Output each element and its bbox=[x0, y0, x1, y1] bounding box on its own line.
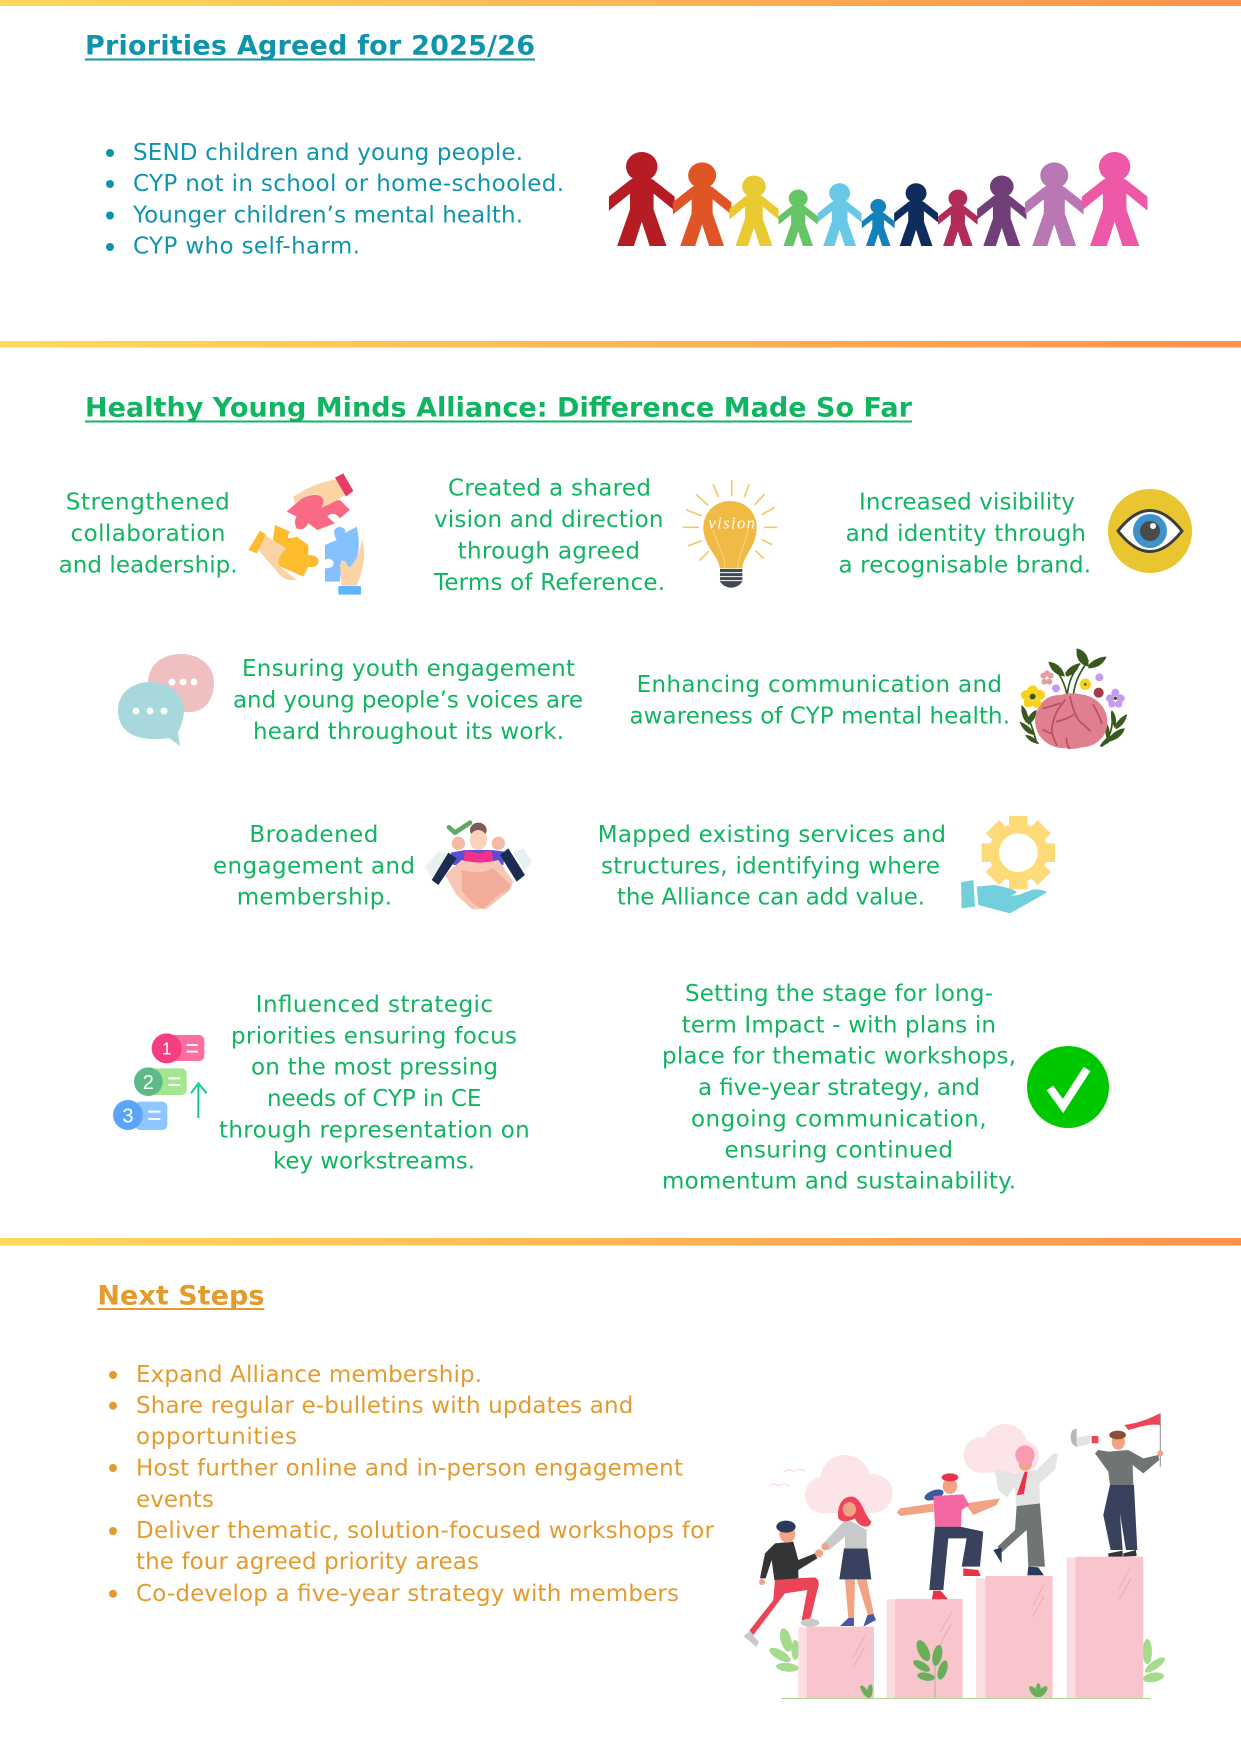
heading: priorities: Priorities Agreed for 2025/26 bbox=[85, 30, 535, 62]
text: youth engagement bbox=[233, 656, 583, 745]
icon: ranked list bbox=[113, 1033, 207, 1130]
next steps bullet list: opportunities bbox=[136, 1424, 297, 1450]
text: broadened membership: membership. bbox=[237, 884, 392, 910]
text: long-term impact bbox=[662, 981, 1016, 1194]
text: visibility bbox=[838, 490, 1091, 578]
icon: ranked list: 3 bbox=[122, 1105, 134, 1127]
person: woman helping bbox=[821, 1497, 876, 1627]
heading: next steps: Next Steps bbox=[97, 1280, 264, 1312]
icon: ranked list: 2 bbox=[143, 1072, 154, 1094]
text: strategic priorities: key workstreams. bbox=[273, 1148, 475, 1174]
next steps bullet list: the four agreed priority areas bbox=[136, 1549, 479, 1575]
text: communication: Enhancing communication and bbox=[637, 672, 1002, 698]
text: long-term impact: term Impact - with plans in bbox=[682, 1012, 996, 1038]
text: strategic priorities: Influenced strategic bbox=[256, 992, 493, 1018]
text: long-term impact: a five-year strategy, and bbox=[698, 1075, 980, 1101]
clouds and birds bbox=[769, 1424, 1039, 1513]
text: strategic priorities: on the most pressing bbox=[251, 1055, 498, 1081]
icon: speech bubbles bbox=[118, 654, 214, 746]
text: collaboration bbox=[59, 490, 238, 578]
text: long-term impact: place for thematic workshops, bbox=[662, 1044, 1016, 1070]
text: mapped services: Mapped existing services and bbox=[598, 822, 946, 848]
text: shared vision: Terms of Reference. bbox=[433, 570, 665, 596]
panel: priorities agreed bbox=[85, 30, 1147, 260]
plants in front bbox=[859, 1638, 1049, 1699]
text: mapped services: structures, identifying where bbox=[601, 853, 940, 879]
text: shared vision bbox=[433, 476, 665, 596]
plants behind bbox=[767, 1627, 1167, 1684]
text: shared vision: Created a shared bbox=[448, 476, 651, 502]
step blocks bbox=[781, 1557, 1151, 1699]
text: strategic priorities: needs of CYP in CE bbox=[267, 1086, 481, 1112]
heading: difference made: Healthy Young Minds Alliance: Difference Made So Far bbox=[85, 392, 913, 424]
icon: vision light bulb: vision bbox=[708, 513, 755, 532]
icon: gear in hand bbox=[961, 816, 1055, 913]
priorities bullet list: Younger children’s mental health. bbox=[132, 202, 523, 228]
next steps bullet list: Co-develop a five-year strategy with members bbox=[136, 1581, 679, 1607]
priorities bullet list: CYP who self-harm. bbox=[133, 234, 360, 260]
text: visibility: Increased visibility bbox=[859, 490, 1075, 516]
text: long-term impact: ongoing communication, bbox=[691, 1106, 986, 1132]
next steps bullet list: Expand Alliance membership. bbox=[136, 1362, 482, 1388]
text: long-term impact: Setting the stage for long- bbox=[685, 981, 993, 1007]
icon: puzzle hands bbox=[248, 473, 364, 595]
icon: vision light bulb bbox=[683, 481, 777, 588]
next steps bullet list: events bbox=[136, 1487, 214, 1513]
text: broadened membership: engagement and bbox=[213, 853, 415, 879]
text: shared vision: through agreed bbox=[458, 538, 640, 564]
person: man with megaphone and flag bbox=[1071, 1413, 1163, 1557]
text: broadened membership: Broadened bbox=[249, 822, 378, 848]
priorities bullet list bbox=[106, 140, 564, 260]
text: visibility: and identity through bbox=[846, 521, 1086, 547]
next steps bullet list bbox=[109, 1362, 715, 1607]
text: strategic priorities: priorities ensuring focus bbox=[231, 1023, 517, 1049]
person: man with red tie bbox=[993, 1445, 1058, 1575]
text: collaboration: Strengthened bbox=[66, 490, 230, 516]
next steps bullet list: Share regular e-bulletins with updates and bbox=[136, 1393, 633, 1419]
person: climbing man bbox=[743, 1521, 823, 1647]
priorities bullet list: CYP not in school or home-schooled. bbox=[133, 171, 564, 197]
text: mapped services bbox=[598, 822, 946, 910]
next steps bullet list: Deliver thematic, solution-focused workshops for bbox=[136, 1518, 715, 1544]
icon: paper-chain people bbox=[609, 152, 1147, 246]
icon: green check bbox=[1027, 1046, 1109, 1128]
text: long-term impact: ensuring continued bbox=[724, 1138, 953, 1164]
text: mapped services: the Alliance can add value. bbox=[617, 884, 925, 910]
text: visibility: a recognisable brand. bbox=[838, 552, 1091, 578]
text: youth engagement: Ensuring youth engagement bbox=[242, 656, 575, 682]
illustration: people climbing steps bbox=[743, 1413, 1167, 1699]
icon: handshake bbox=[425, 823, 532, 909]
priorities bullet list: SEND children and young people. bbox=[133, 140, 523, 166]
text: long-term impact: momentum and sustainability. bbox=[662, 1168, 1016, 1194]
text: broadened membership bbox=[213, 822, 415, 910]
text: strategic priorities: through representation on bbox=[219, 1117, 530, 1143]
text: strategic priorities bbox=[219, 992, 530, 1174]
panel: next steps bbox=[97, 1280, 1167, 1699]
text: youth engagement: heard throughout its work. bbox=[253, 719, 564, 745]
icon: eye bbox=[1108, 489, 1192, 573]
text: shared vision: vision and direction bbox=[434, 507, 664, 533]
icon: ranked list: 1 bbox=[162, 1038, 171, 1058]
next steps bullet list: Host further online and in-person engagement bbox=[136, 1456, 683, 1482]
panel: difference made so far bbox=[59, 392, 1192, 1194]
person: woman in pink top bbox=[897, 1473, 1000, 1599]
text: collaboration: collaboration bbox=[70, 521, 226, 547]
text: communication: awareness of CYP mental health. bbox=[630, 704, 1010, 730]
icon: brain with flowers bbox=[1019, 648, 1127, 749]
text: communication bbox=[630, 672, 1010, 730]
text: youth engagement: and young people’s voices are bbox=[233, 688, 583, 714]
text: collaboration: and leadership. bbox=[59, 552, 238, 578]
